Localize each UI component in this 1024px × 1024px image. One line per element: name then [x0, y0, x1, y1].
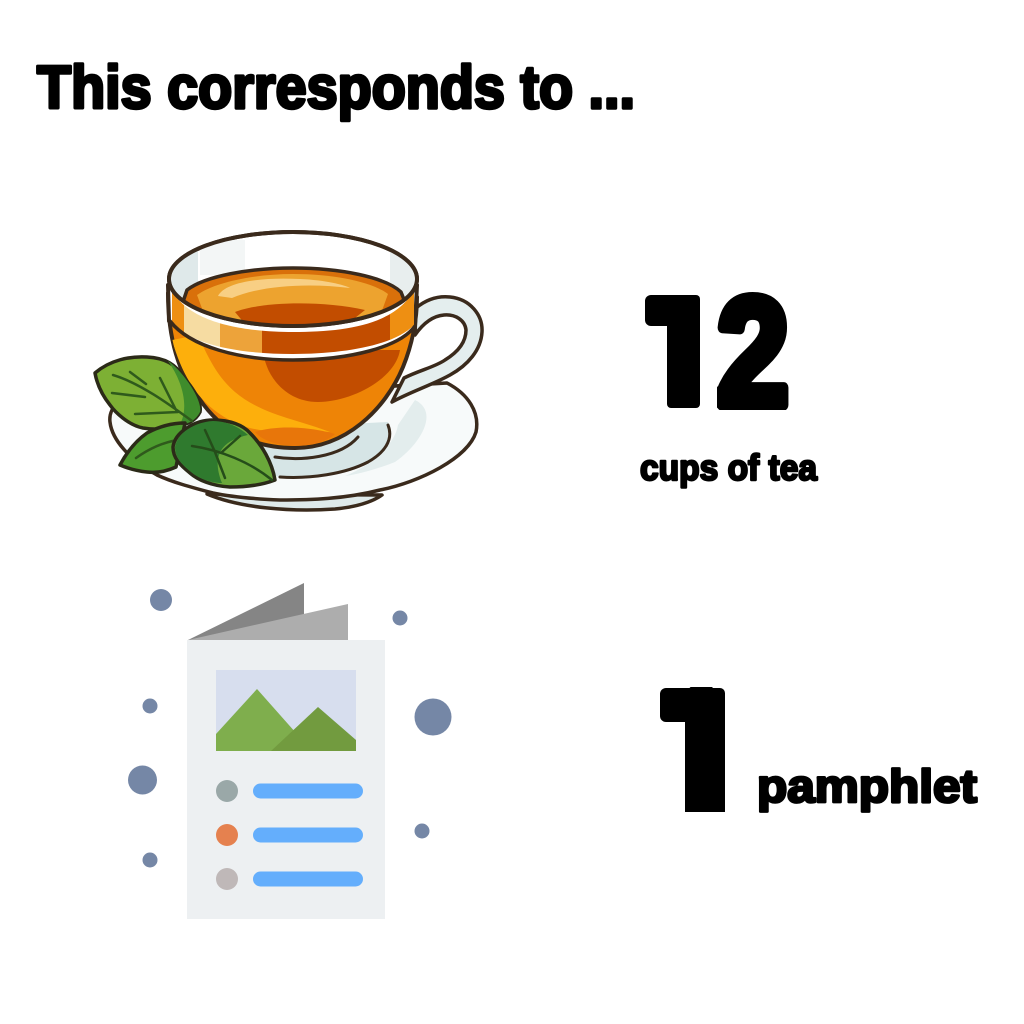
leaf: back left	[95, 357, 200, 429]
big number: 1: 1	[665, 659, 731, 844]
picture	[216, 670, 356, 751]
tea surface	[182, 266, 405, 310]
big number: 1	[660, 687, 725, 812]
icon: pamphlet	[128, 583, 452, 919]
back page light	[188, 604, 348, 640]
big number: 12: 12	[645, 266, 789, 438]
surrounding dots	[128, 589, 452, 868]
tea in cup	[168, 293, 417, 448]
icon: cup of tea	[95, 232, 482, 510]
rim	[169, 232, 417, 326]
cover	[187, 640, 385, 919]
leaves	[95, 357, 275, 487]
back page dark	[188, 583, 304, 640]
big number: 12	[645, 292, 788, 410]
leaf: front	[173, 420, 275, 487]
label: cups of tea: cups of tea	[640, 447, 818, 488]
label: pamphlet: pamphlet	[757, 760, 977, 812]
saucer	[110, 383, 477, 510]
cup handle	[392, 297, 482, 402]
glass rim band	[168, 285, 417, 360]
leaf: back small	[120, 423, 185, 472]
title: This corresponds to ...	[37, 54, 635, 121]
list rows	[216, 780, 363, 890]
